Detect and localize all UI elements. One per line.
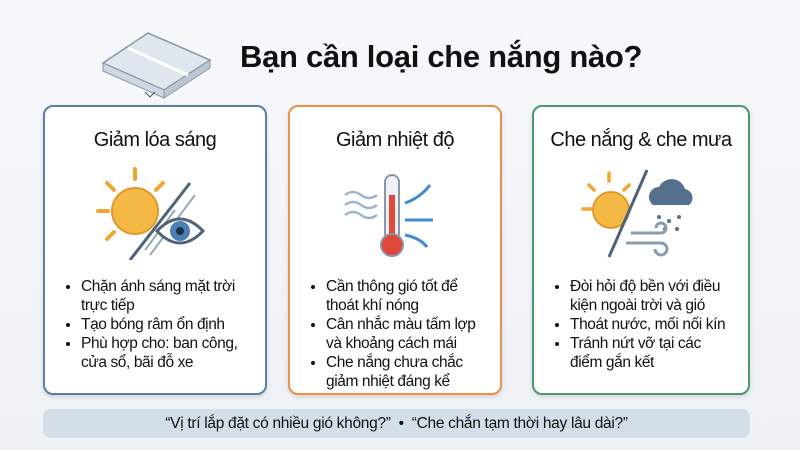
icon: polycarbonate sheet	[102, 32, 212, 99]
heading: Che nắng & che mưa	[550, 129, 732, 151]
heading: Giảm nhiệt độ	[336, 129, 454, 151]
icon: thermometer	[344, 174, 433, 257]
text block: bullets	[555, 278, 725, 371]
text block: bullets: Thoát nước, mối nối kín	[570, 316, 725, 333]
text block: bullets: trực tiếp	[81, 297, 134, 314]
bottom question bar: “Vị trí lắp đặt có nhiều gió không?” • “Che chắn tạm thời hay lâu dài?”	[165, 415, 628, 432]
text block: bullets	[311, 278, 476, 390]
text block: bullets: Tạo bóng râm ổn định	[81, 316, 225, 333]
text block: bullets: cửa sổ, bãi đỗ xe	[81, 354, 193, 371]
text block: bullets: và khoảng cách mái	[326, 335, 457, 352]
text block: bullets: giảm nhiệt đáng kể	[326, 373, 450, 390]
text block: bullets: Che nắng chưa chắc	[326, 354, 463, 371]
text block: bullets: Phù hợp cho: ban công,	[81, 335, 238, 352]
panel: sun & rain	[532, 105, 750, 395]
bottom question bar	[43, 409, 750, 438]
heading: Giảm lóa sáng	[94, 129, 216, 151]
icon: sun and eye	[96, 167, 205, 260]
text block: bullets: Cần thông gió tốt để	[326, 278, 458, 295]
text block: bullets: Cân nhắc màu tấm lợp	[326, 316, 476, 333]
text block: bullets: Tránh nứt vỡ tại các	[570, 335, 701, 352]
title: Bạn cần loại che nắng nào?	[240, 39, 642, 74]
text block: bullets: thoát khí nóng	[326, 297, 419, 314]
text block: bullets	[66, 278, 238, 371]
text block: bullets: điểm gắn kết	[570, 354, 654, 371]
text block: bullets: Đòi hỏi độ bền với điều	[570, 278, 720, 295]
panel: glare	[43, 105, 267, 395]
icon: sun cloud rain	[581, 169, 692, 258]
text block: bullets: kiện ngoài trời và gió	[570, 297, 705, 314]
panel: heat	[288, 105, 502, 395]
text block: bullets: Chặn ánh sáng mặt trời	[81, 278, 235, 295]
